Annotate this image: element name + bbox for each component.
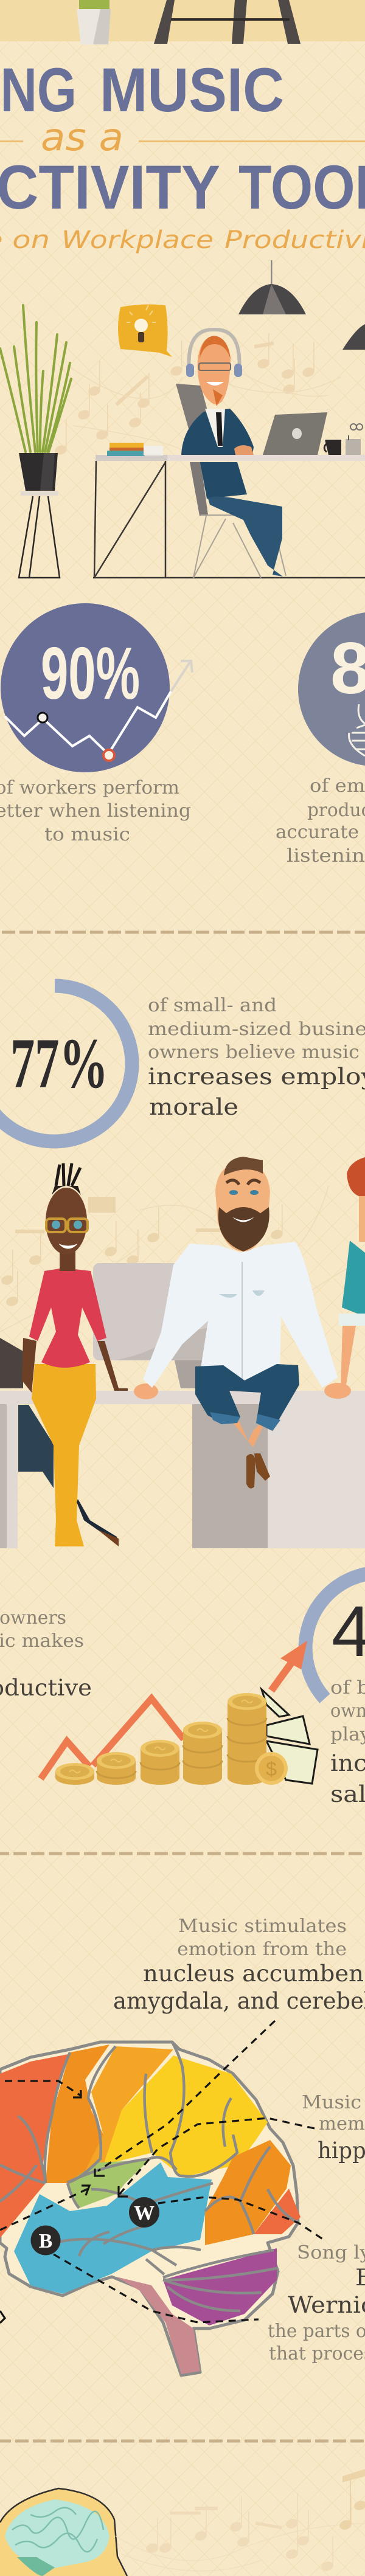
brain callout: emotion: emotion from the bbox=[177, 1939, 347, 1960]
stat: owners say music makes workers productive bbox=[0, 1607, 92, 1701]
brain folds bbox=[0, 2042, 298, 2311]
title: MUSIC bbox=[100, 55, 284, 125]
brain callout: emotion: Music stimulates bbox=[178, 1916, 347, 1937]
caption: of workers perform bbox=[0, 777, 179, 798]
brain callout: lyrics bbox=[268, 2242, 365, 2364]
divider bbox=[2, 930, 365, 934]
hands bbox=[134, 1383, 158, 1399]
speech bubble with light bulb bbox=[118, 305, 172, 357]
as a: as a bbox=[41, 115, 123, 159]
divider bbox=[0, 1852, 365, 1855]
callout dashed lines bbox=[0, 2021, 324, 2322]
table bbox=[0, 1391, 365, 1548]
caption: of small- and bbox=[148, 995, 277, 1016]
brain diagram bbox=[0, 2021, 324, 2375]
Broca marker: B bbox=[39, 2230, 52, 2252]
circle bbox=[1, 603, 170, 772]
brain callout: memory bbox=[302, 2092, 365, 2164]
progress ring bbox=[0, 986, 132, 1141]
bills bbox=[262, 1689, 318, 1784]
line chart with arrow bbox=[5, 660, 192, 761]
legs bbox=[32, 1364, 96, 1546]
arrowheads bbox=[0, 2090, 128, 2323]
stat: 40% bbox=[271, 1573, 365, 1807]
stat: 88% bbox=[276, 612, 365, 867]
circle bbox=[298, 612, 365, 766]
stat: 77%: owners believe music bbox=[148, 1042, 360, 1063]
number: 90% bbox=[41, 632, 140, 715]
man with headphones bbox=[176, 330, 286, 578]
brain callout: emotion bbox=[113, 1916, 365, 2014]
music notes bbox=[116, 2493, 365, 2572]
progress ring bbox=[305, 1573, 365, 1698]
icon: thumbs up bbox=[349, 704, 365, 756]
shoes and legs bbox=[228, 1417, 268, 1447]
divider bbox=[0, 2440, 365, 2442]
title: Workplace bbox=[61, 226, 214, 254]
head with glowing brain bbox=[0, 2488, 127, 2576]
sweater bbox=[29, 1268, 106, 1368]
orange trend lines bbox=[41, 1698, 184, 1779]
music notes background bbox=[0, 1186, 365, 1332]
head bbox=[215, 1160, 270, 1252]
seated person at left bbox=[0, 1338, 54, 1488]
Broca marker bbox=[30, 2226, 61, 2255]
title bbox=[0, 55, 365, 254]
coins and money chart bbox=[41, 1689, 318, 1785]
brain base bbox=[0, 2042, 298, 2375]
stat: 77% bbox=[0, 986, 365, 1141]
head bbox=[60, 1247, 75, 1271]
dollar coin bbox=[255, 1752, 288, 1785]
bottom illustration: head and music bbox=[0, 2469, 365, 2576]
desk bbox=[93, 424, 365, 578]
coins and money chart: $ bbox=[266, 1758, 277, 1780]
office illustration bbox=[0, 260, 365, 578]
title: CTIVITY bbox=[0, 153, 220, 222]
number: 77% bbox=[10, 1023, 108, 1103]
plant bbox=[0, 305, 71, 578]
top band with plant pot and stool bbox=[0, 0, 365, 44]
brain regions bbox=[0, 2054, 68, 2238]
coin stacks bbox=[55, 1693, 266, 1785]
jeans bbox=[195, 1364, 299, 1431]
bearded man bbox=[134, 1157, 351, 1489]
shirt bbox=[143, 1242, 338, 1388]
woman at right bbox=[339, 1157, 365, 1388]
stat: 90% bbox=[0, 603, 192, 845]
monitor bbox=[93, 1263, 223, 1388]
lamps bbox=[238, 260, 365, 350]
large note bbox=[338, 2469, 365, 2531]
stat: 77%: morale bbox=[149, 1094, 238, 1120]
stat: 77%: medium-sized business bbox=[148, 1019, 365, 1040]
woman in red bbox=[22, 1163, 128, 1546]
music notes background bbox=[54, 333, 341, 456]
Wernicke marker: W bbox=[134, 2202, 155, 2225]
arms bbox=[22, 1338, 36, 1393]
Wernicke marker bbox=[129, 2197, 159, 2228]
arrow bbox=[271, 1655, 297, 1691]
laptop bbox=[263, 412, 327, 455]
team illustration bbox=[0, 1157, 365, 1548]
stat: 90%: to music bbox=[44, 824, 130, 845]
